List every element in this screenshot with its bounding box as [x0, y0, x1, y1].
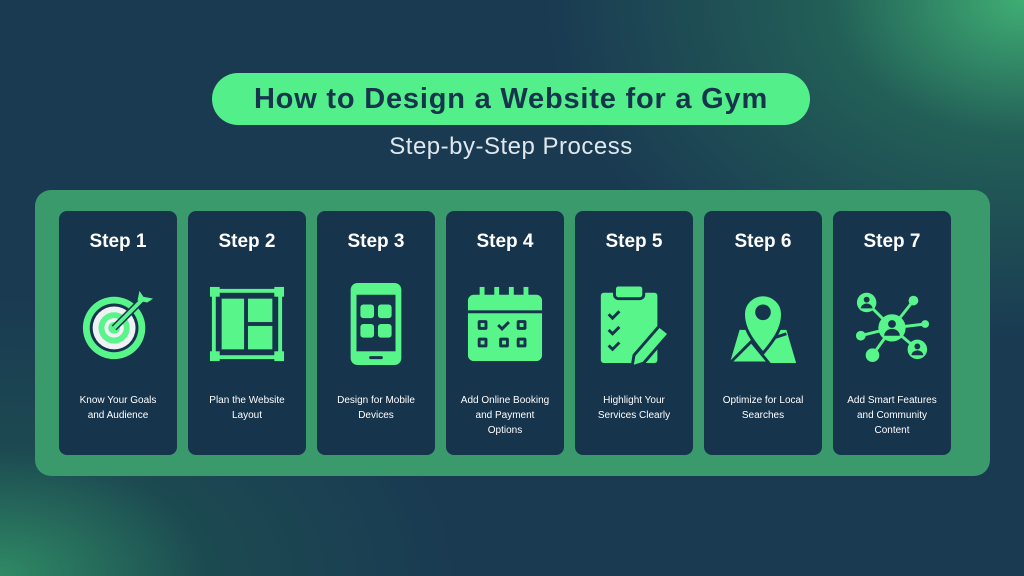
title: How to Design a Website for a Gym: [254, 83, 768, 115]
card: step 5: Services Clearly: [598, 410, 670, 421]
card: step 7: Add Smart Features: [847, 395, 937, 406]
card: step 7: and Community: [857, 410, 927, 421]
card: step 5: Step 5: [605, 231, 663, 252]
card: step 1: Know Your Goals: [80, 395, 156, 406]
card: step 7: [833, 211, 951, 455]
card: step 3: Step 3: [347, 231, 405, 252]
panel: steps: [35, 190, 990, 476]
card: step 7: Content: [874, 425, 910, 436]
card: step 4: Add Online Booking: [461, 395, 549, 406]
icon: clipboard: [600, 286, 667, 365]
card: step 3: [317, 211, 435, 455]
card: step 4: and Payment: [476, 410, 534, 421]
icon: calendar: [468, 286, 542, 361]
card: step 6: Searches: [742, 410, 784, 421]
card: step 2: [188, 211, 306, 455]
title: [212, 73, 810, 125]
card: step 1: and Audience: [88, 410, 148, 421]
card: step 6: Step 6: [734, 231, 792, 252]
card: step 4: Options: [488, 425, 522, 436]
card: step 5: [575, 211, 693, 455]
card: step 7: Step 7: [863, 231, 921, 252]
card: step 2: Step 2: [218, 231, 276, 252]
card: step 4: Step 4: [476, 231, 534, 252]
icon: network: [856, 292, 929, 362]
icon: layout: [210, 286, 284, 362]
card: step 1: [59, 211, 177, 455]
icon: target: [82, 291, 153, 360]
icon: map pin: [730, 296, 796, 363]
card: step 3: Devices: [358, 410, 394, 421]
card: step 2: Plan the Website: [209, 395, 285, 406]
card: step 3: Design for Mobile: [337, 395, 415, 406]
card: step 1: Step 1: [89, 231, 147, 252]
card: step 5: Highlight Your: [603, 395, 665, 406]
card: step 2: Layout: [232, 410, 262, 421]
card: step 6: [704, 211, 822, 455]
card: step 6: Optimize for Local: [723, 395, 803, 406]
card: step 4: [446, 211, 564, 455]
icon: mobile: [350, 283, 402, 365]
subtitle: Step-by-Step Process: [389, 133, 633, 160]
